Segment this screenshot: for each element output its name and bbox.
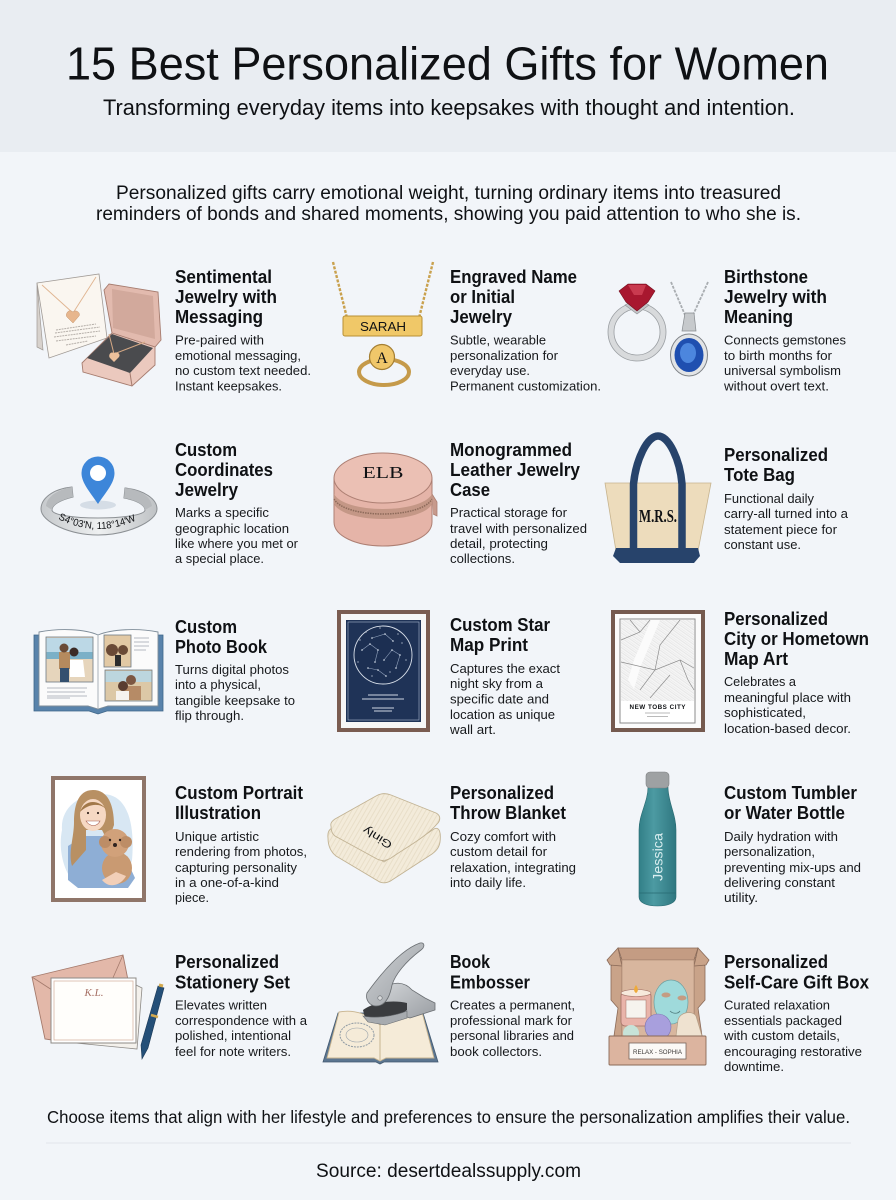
description: book collectors.: [450, 1044, 542, 1059]
description: carry-all turned into a: [724, 506, 849, 521]
description: Permanent customization.: [450, 378, 601, 394]
panel: Custom Photo Book: [34, 617, 295, 723]
heading: Book: [450, 952, 491, 972]
description: location-based decor.: [724, 721, 851, 736]
description: [175, 829, 307, 905]
description: Unique artistic: [175, 829, 259, 844]
heading: Birthstone: [724, 267, 808, 287]
source line: Source: desertdealssupply.com: [316, 1161, 581, 1182]
heading: Jewelry: [450, 307, 512, 327]
description: personal libraries and: [450, 1028, 574, 1043]
description: correspondence with a: [175, 1013, 308, 1028]
heading: Meaning: [724, 307, 793, 327]
intro text: [96, 182, 801, 225]
heading: Jewelry with: [175, 287, 277, 307]
icon: folded knit blanket: Ginly: [361, 823, 395, 851]
description: delivering constant: [724, 875, 835, 890]
heading: Coordinates: [175, 460, 273, 480]
heading: Custom: [175, 440, 237, 460]
subtitle: Transforming everyday items into keepsakes with thought and intention.: [103, 95, 795, 120]
heading: Illustration: [175, 803, 261, 823]
icon: framed portrait of woman with dog: [51, 776, 146, 902]
heading: [175, 952, 290, 992]
icon: round leather jewelry case: [334, 453, 437, 546]
description: [175, 505, 299, 566]
description: wall art.: [449, 722, 496, 737]
heading: Custom: [175, 617, 237, 637]
description: Turns digital photos: [175, 662, 289, 677]
panel: Custom Coordinates Jewelry: [40, 440, 299, 566]
panel: Birthstone Jewelry with Meaning: [608, 267, 846, 394]
heading: City or Hometown: [724, 629, 869, 649]
description: piece.: [175, 890, 209, 905]
description: personalization,: [724, 844, 815, 859]
heading: Jewelry with: [724, 287, 827, 307]
icon: coordinates cuff and map pin: [40, 456, 158, 536]
description: a special place.: [175, 551, 264, 566]
icon: framed city map: [611, 610, 705, 732]
icon: framed city map: NEW TOBS CITY: [630, 704, 686, 711]
icon: gold name bar necklace and initial ring: [333, 262, 433, 385]
heading: Embosser: [450, 972, 530, 992]
heading: Case: [450, 480, 490, 500]
description: Functional daily: [724, 491, 814, 506]
description: Subtle, wearable: [450, 332, 546, 348]
icon: coordinates cuff and map pin: S4°03'N, 118°14'W: [59, 514, 134, 530]
icon: embosser on open book: [323, 943, 438, 1064]
icon: gold name bar necklace and initial ring: A: [376, 350, 388, 367]
description: detail, protecting: [450, 536, 548, 551]
description: [175, 332, 311, 394]
heading: or Initial: [450, 287, 515, 307]
description: in a one-of-a-kind: [175, 875, 279, 890]
heading: Throw Blanket: [450, 803, 566, 823]
title: 15 Best Personalized Gifts for Women: [66, 38, 829, 90]
heading: Self-Care Gift Box: [724, 972, 869, 992]
description: Connects gemstones: [724, 332, 846, 348]
description: [450, 829, 576, 890]
description: [450, 998, 575, 1059]
icon: ruby ring and sapphire pendant: [608, 282, 708, 376]
description: everyday use.: [450, 363, 530, 378]
icon: framed star map: [337, 610, 430, 732]
heading: Engraved Name: [450, 267, 577, 287]
heading: Custom Tumbler: [724, 783, 857, 803]
description: Pre-paired with: [175, 332, 264, 348]
icon: necklace card and gift box: [37, 274, 161, 386]
description: to birth months for: [724, 348, 833, 363]
description: emotional messaging,: [175, 348, 301, 363]
heading: Jewelry: [175, 480, 238, 500]
icon: monogrammed tote bag: M.R.S.: [639, 506, 677, 526]
heading: [450, 783, 566, 823]
heading: [724, 445, 828, 485]
icon: self-care gift box: [607, 948, 709, 1065]
heading: Messaging: [175, 307, 263, 327]
description: [723, 332, 846, 394]
description: specific date and: [450, 692, 549, 706]
heading: [450, 267, 577, 327]
description: without overt text.: [723, 378, 829, 394]
description: relaxation, integrating: [450, 860, 576, 875]
icon: monogrammed tote bag: [605, 436, 711, 563]
description: Marks a specific: [175, 505, 269, 520]
panel: Personalized City or Hometown Map Art: [611, 609, 869, 736]
description: [175, 662, 295, 723]
icon: gold name bar necklace and initial ring: SARAH: [360, 319, 406, 334]
description: into a physical,: [175, 677, 261, 692]
heading: [724, 609, 869, 669]
heading: Personalized: [724, 609, 828, 629]
closing advice text: Choose items that align with her lifestyle and preferences to ensure the personalization amplifies their value.: [47, 1107, 850, 1127]
description: like where you met or: [175, 536, 299, 551]
heading: or Water Bottle: [724, 803, 845, 823]
description: flip through.: [175, 708, 244, 723]
description: Captures the exact: [450, 661, 560, 676]
heading: Sentimental: [175, 267, 272, 287]
description: professional mark for: [450, 1013, 573, 1028]
icon: teal water bottle: [639, 772, 676, 906]
heading: [175, 783, 303, 823]
heading: Personalized: [175, 952, 279, 972]
heading: Personalized: [450, 783, 554, 803]
icon: stationery cards envelope and pen: [32, 955, 164, 1059]
description: universal symbolism: [724, 363, 841, 378]
panel: Personalized Throw Blanket: [328, 783, 576, 890]
description: personalization for: [450, 348, 559, 363]
description: geographic location: [175, 521, 289, 536]
description: into daily life.: [450, 875, 526, 890]
description: location as unique: [450, 707, 555, 722]
panel: Personalized Self-Care Gift Box: [607, 948, 869, 1074]
description: Instant keepsakes.: [175, 378, 282, 394]
icon: self-care gift box: RELAX - SOPHIA: [633, 1049, 683, 1056]
panel: Personalized Stationery Set: [32, 952, 308, 1059]
description: [450, 505, 587, 566]
heading: Custom Portrait: [175, 783, 303, 803]
icon: round leather jewelry case: ELB: [362, 463, 404, 482]
heading: Monogrammed: [450, 440, 572, 460]
panel: Personalized Tote Bag: [605, 436, 849, 563]
heading: [450, 952, 530, 992]
heading: [450, 440, 580, 500]
panel: Custom Portrait Illustration: [51, 776, 307, 905]
description: capturing personality: [175, 860, 297, 875]
description: statement piece for: [724, 522, 838, 537]
header band: [0, 0, 896, 152]
description: Curated relaxation: [724, 998, 830, 1012]
description: [449, 661, 560, 737]
panel: Monogrammed Leather Jewelry Case: [334, 440, 587, 566]
heading: Leather Jewelry: [450, 460, 580, 480]
heading: Custom Star: [450, 615, 550, 635]
description: constant use.: [724, 537, 801, 552]
icon: open photo book: [34, 630, 163, 714]
panel: Book Embosser: [323, 943, 575, 1064]
heading: Personalized: [724, 952, 828, 972]
description: collections.: [450, 551, 515, 566]
heading: [450, 615, 550, 655]
panel: Custom Tumbler or Water Bottle: [639, 772, 861, 906]
description: Cozy comfort with: [450, 829, 556, 844]
description: rendering from photos,: [175, 844, 307, 859]
icon: teal water bottle: Jessica: [650, 833, 666, 881]
description: night sky from a: [450, 676, 544, 691]
description: Practical storage for: [450, 505, 568, 520]
panel: Sentimental Jewelry with Messaging: [37, 267, 311, 394]
heading: [175, 617, 268, 657]
description: no custom text needed.: [175, 363, 311, 378]
description: preventing mix-ups and: [724, 860, 861, 875]
description: downtime.: [724, 1059, 784, 1074]
heading: Photo Book: [175, 637, 268, 657]
description: Daily hydration with: [724, 829, 838, 844]
description: [450, 332, 601, 394]
description: custom detail for: [450, 844, 548, 859]
icon: stationery cards envelope and pen: K.L.: [84, 987, 103, 999]
description: [723, 998, 862, 1074]
heading: Map Print: [450, 635, 528, 655]
description: [175, 998, 308, 1059]
description: sophisticated,: [724, 705, 806, 720]
intro text: reminders of bonds and shared moments, showing you paid attention to who she is.: [96, 203, 801, 225]
description: Celebrates a: [724, 674, 797, 689]
panel: Engraved Name or Initial Jewelry: [333, 262, 601, 394]
heading: [175, 440, 273, 500]
description: meaningful place with: [724, 690, 851, 705]
heading: Tote Bag: [724, 465, 795, 485]
description: [724, 829, 861, 905]
heading: [175, 267, 277, 327]
description: polished, intentional: [175, 1028, 291, 1043]
description: Creates a permanent,: [450, 998, 575, 1012]
description: [724, 491, 849, 552]
description: tangible keepsake to: [175, 693, 295, 708]
description: encouraging restorative: [724, 1044, 862, 1059]
description: utility.: [724, 890, 758, 905]
heading: [724, 952, 869, 992]
description: [724, 674, 851, 736]
heading: Personalized: [724, 445, 828, 465]
description: with custom details,: [723, 1028, 840, 1043]
description: Elevates written: [175, 998, 267, 1012]
intro text: Personalized gifts carry emotional weight, turning ordinary items into treasured: [116, 182, 781, 204]
description: travel with personalized: [450, 521, 587, 536]
panel: Custom Star Map Print: [337, 610, 560, 737]
icon: folded knit blanket: [328, 794, 440, 883]
description: feel for note writers.: [175, 1044, 291, 1059]
heading: [724, 267, 827, 327]
heading: Stationery Set: [175, 972, 290, 992]
heading: [724, 783, 857, 823]
heading: Map Art: [724, 649, 788, 669]
description: essentials packaged: [724, 1013, 842, 1028]
